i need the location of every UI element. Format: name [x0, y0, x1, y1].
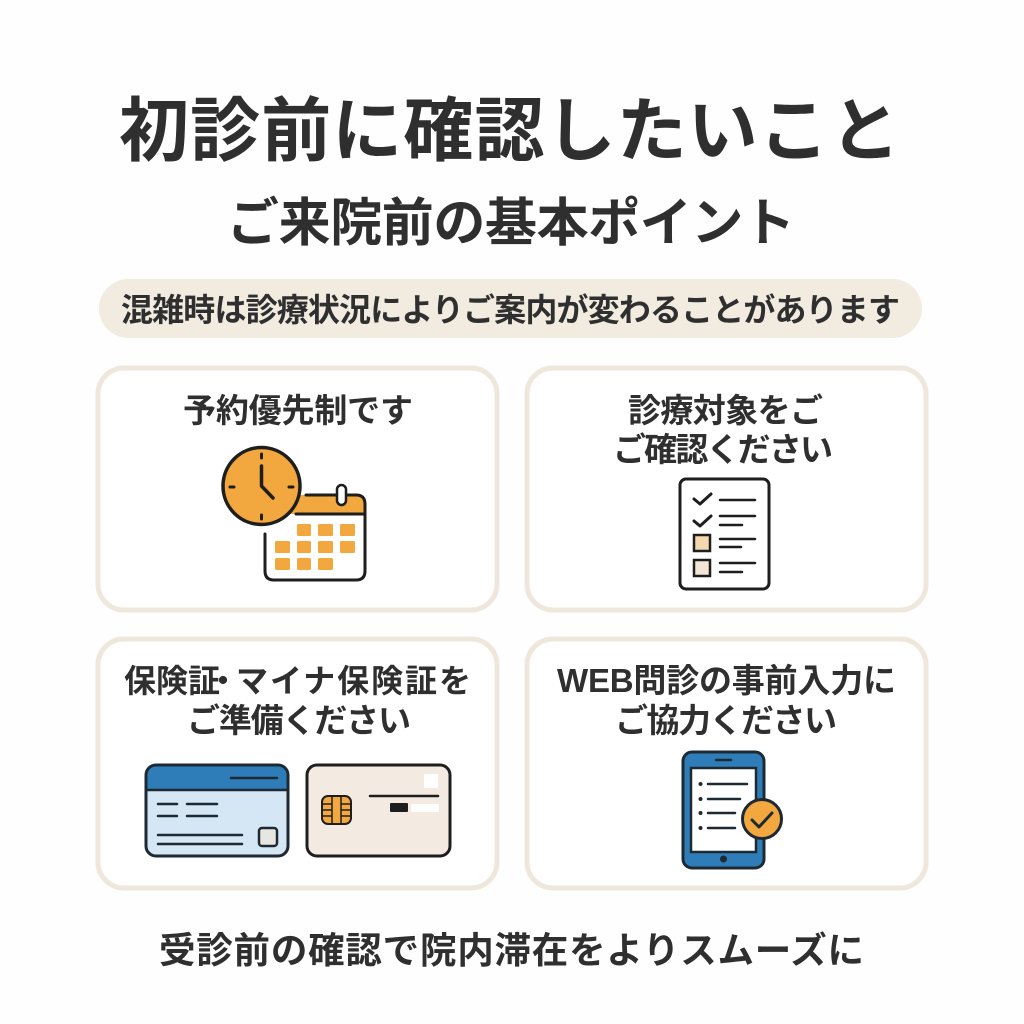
panel heading: eligibility — [613, 392, 833, 468]
icon: checklist — [680, 479, 769, 589]
icon: my number card — [307, 765, 450, 856]
panel: reservation — [98, 368, 497, 610]
panel heading: insurance card: 保険証 — [124, 663, 220, 699]
panel heading: insurance card: ・ — [207, 663, 239, 699]
panel heading: insurance card: ご準備ください — [187, 702, 411, 739]
panel heading: reservation: 予約優先制です — [183, 392, 413, 429]
icon: tablet with check — [683, 752, 782, 868]
panel heading: insurance card: マイナ保険証を — [236, 663, 471, 699]
icon: insurance card — [146, 765, 288, 856]
panel heading: web questionnaire: WEB問診の事前入力に — [557, 662, 896, 699]
icon: clock and calendar — [223, 448, 365, 580]
footer message: 受診前の確認で院内滞在をよりスムーズに — [159, 930, 864, 971]
title: 初診前に確認したいこと — [119, 92, 900, 170]
notice pill: 混雑時は診療状況によりご案内が変わることがあります — [121, 292, 900, 328]
notice pill — [99, 279, 922, 338]
panel: eligibility — [527, 368, 926, 610]
panel heading: web questionnaire — [557, 662, 896, 739]
panel heading: insurance card — [124, 663, 471, 739]
panel heading: web questionnaire: ご協力ください — [615, 702, 837, 739]
subtitle: ご来院前の基本ポイント — [227, 195, 795, 253]
panel heading: eligibility: ご確認ください — [613, 431, 833, 468]
panel: insurance card — [98, 639, 497, 888]
panel heading: eligibility: 診療対象をご — [628, 392, 823, 429]
panel: web questionnaire — [527, 639, 926, 888]
